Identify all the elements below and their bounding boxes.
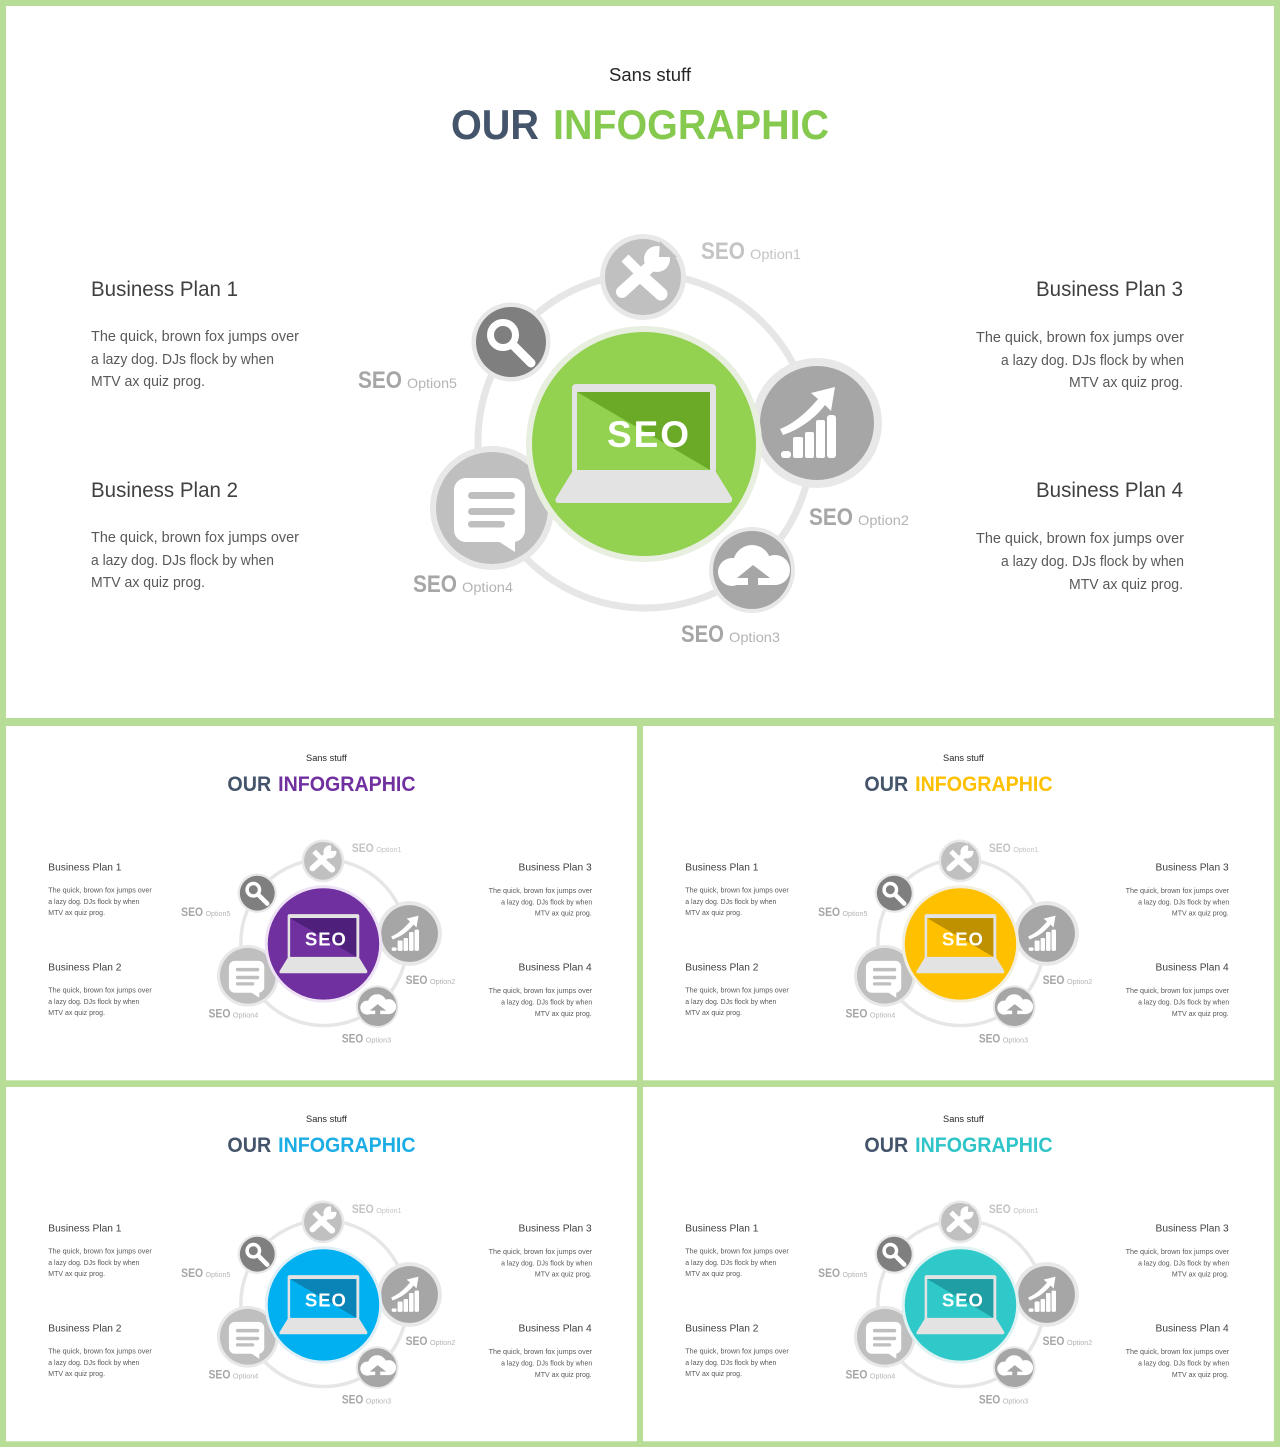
panel: yellow infographic [643, 726, 1274, 1080]
label: SEO Option5: SEO [818, 1266, 840, 1280]
icon: tools [302, 839, 344, 882]
text block: Business Plan 3: MTV ax quiz prog. [1069, 374, 1183, 391]
text block: Business Plan 4 [489, 962, 593, 1018]
central SEO laptop circle [265, 885, 382, 1003]
title: INFOGRAPHIC [553, 101, 829, 148]
label: SEO Option4 [413, 571, 513, 598]
label: SEO Option3: Option3 [1003, 1398, 1028, 1405]
text block: Business Plan 3: MTV ax quiz prog. [535, 909, 592, 918]
diagram ring [241, 859, 407, 1026]
text block: Business Plan 3: Business Plan 3 [1156, 862, 1229, 873]
central SEO laptop circle: SEO [305, 1289, 346, 1310]
label: SEO Option3: SEO [342, 1392, 363, 1406]
label: SEO Option4 [846, 1368, 895, 1382]
text block: Business Plan 1: a lazy dog. DJs flock by when [48, 1258, 139, 1267]
text block: Business Plan 2 [685, 1323, 789, 1378]
label: SEO Option2: Option2 [430, 1340, 455, 1347]
text block: Business Plan 1: Business Plan 1 [48, 862, 122, 873]
label: SEO Option4: SEO [209, 1368, 230, 1382]
label: SEO Option2 [406, 1334, 455, 1348]
label: SEO Option4 [209, 1368, 258, 1382]
text block: Business Plan 2 [91, 479, 299, 591]
text block: Business Plan 1: a lazy dog. DJs flock by when [48, 897, 139, 906]
text block: Business Plan 3 [489, 1223, 593, 1279]
text block: Business Plan 4: MTV ax quiz prog. [1172, 1370, 1229, 1379]
text block: Business Plan 4: MTV ax quiz prog. [535, 1370, 592, 1379]
label: SEO Option4: SEO [209, 1007, 230, 1021]
text block: Business Plan 2: Business Plan 2 [685, 962, 759, 973]
central SEO laptop circle [526, 326, 762, 562]
label: SEO Option5 [181, 1266, 231, 1280]
text block: Business Plan 1: The quick, brown fox jumps over [91, 328, 299, 345]
label: SEO Option2: Option2 [430, 979, 455, 986]
text block: Business Plan 3: a lazy dog. DJs flock by when [1001, 352, 1184, 369]
label: SEO Option5: Option5 [843, 1272, 868, 1279]
text block: Business Plan 1: The quick, brown fox jumps over [48, 886, 152, 895]
label: SEO Option3: SEO [342, 1031, 363, 1045]
text block: Business Plan 2: The quick, brown fox jumps over [685, 1347, 789, 1356]
text block: Business Plan 1: MTV ax quiz prog. [91, 373, 205, 390]
subtitle: Sans stuff [943, 1114, 984, 1124]
title: INFOGRAPHIC [278, 773, 416, 796]
text block: Business Plan 2 [48, 1323, 152, 1378]
text block: Business Plan 4 [489, 1323, 593, 1379]
panel: main green infographic [6, 6, 1274, 718]
text block: Business Plan 3: a lazy dog. DJs flock by when [501, 898, 592, 907]
label: SEO Option4: Option4 [233, 1013, 258, 1020]
central SEO laptop circle: SEO [942, 928, 983, 949]
label: SEO Option5 [818, 905, 868, 919]
diagram ring [878, 1220, 1044, 1387]
text block: Business Plan 1: Business Plan 1 [91, 278, 238, 301]
text block: Business Plan 3: MTV ax quiz prog. [535, 1270, 592, 1279]
icon: search [472, 302, 550, 382]
text block: Business Plan 3: The quick, brown fox jumps over [1126, 886, 1230, 895]
text block: Business Plan 3: The quick, brown fox jumps over [489, 886, 593, 895]
text block: Business Plan 4: Business Plan 4 [1156, 1323, 1229, 1334]
title: INFOGRAPHIC [915, 1134, 1053, 1157]
text block: Business Plan 1 [685, 862, 789, 917]
text block: Business Plan 4 [1126, 962, 1230, 1018]
icon: search [875, 1235, 914, 1274]
text block: Business Plan 2: Business Plan 2 [685, 1323, 759, 1334]
label: SEO Option3: SEO [681, 621, 724, 648]
text block: Business Plan 4: MTV ax quiz prog. [1172, 1009, 1229, 1018]
icon: tools [939, 839, 981, 882]
text block: Business Plan 1 [48, 862, 152, 917]
text block: Business Plan 4 [1126, 1323, 1230, 1379]
text block: Business Plan 2 [685, 962, 789, 1017]
central SEO laptop circle: SEO [942, 1289, 983, 1310]
text block: Business Plan 3: The quick, brown fox jumps over [1126, 1247, 1230, 1256]
text block: Business Plan 3: Business Plan 3 [1036, 278, 1183, 301]
text block: Business Plan 1: The quick, brown fox jumps over [685, 1247, 789, 1256]
text block: Business Plan 3 [976, 278, 1184, 391]
label: SEO Option1: SEO [352, 841, 374, 855]
icon: speech bubble [217, 1306, 279, 1368]
panel: purple infographic [6, 726, 637, 1080]
label: SEO Option1: Option1 [376, 847, 402, 854]
text block: Business Plan 3 [489, 862, 593, 918]
diagram ring [478, 274, 812, 608]
icon: tools [600, 234, 686, 320]
text block: Business Plan 2: Business Plan 2 [48, 962, 122, 973]
icon: growth chart [752, 358, 882, 488]
text block: Business Plan 1 [685, 1223, 789, 1278]
text block: Business Plan 3: MTV ax quiz prog. [1172, 909, 1229, 918]
text block: Business Plan 1: Business Plan 1 [685, 862, 759, 873]
label: SEO Option2: SEO [406, 973, 427, 987]
label: SEO Option1: SEO [352, 1202, 374, 1216]
label: SEO Option1 [352, 841, 402, 855]
text block: Business Plan 4: The quick, brown fox jumps over [489, 1347, 593, 1356]
label: SEO Option4: Option4 [233, 1374, 258, 1381]
label: SEO Option1: SEO [701, 238, 745, 265]
text block: Business Plan 1: a lazy dog. DJs flock by when [91, 351, 274, 368]
label: SEO Option4: Option4 [462, 579, 513, 595]
label: SEO Option5 [181, 905, 231, 919]
label: SEO Option1: Option1 [750, 246, 801, 262]
icon: speech bubble [854, 1306, 916, 1368]
label: SEO Option5: Option5 [206, 911, 231, 918]
label: SEO Option4: SEO [413, 571, 457, 598]
text block: Business Plan 1: a lazy dog. DJs flock by when [685, 1258, 776, 1267]
central SEO laptop circle: SEO [607, 414, 689, 455]
title: INFOGRAPHIC [278, 1134, 416, 1157]
text block: Business Plan 2: a lazy dog. DJs flock by when [48, 997, 139, 1006]
label: SEO Option1 [989, 841, 1039, 855]
title: OUR [451, 101, 539, 148]
label: SEO Option5: Option5 [407, 375, 457, 391]
label: SEO Option4: SEO [846, 1368, 867, 1382]
label: SEO Option3: SEO [979, 1392, 1000, 1406]
central SEO laptop circle: SEO [305, 928, 346, 949]
text block: Business Plan 4: The quick, brown fox jumps over [489, 986, 593, 995]
icon: search [238, 1235, 277, 1274]
label: SEO Option1: SEO [989, 1202, 1011, 1216]
diagram ring [241, 1220, 407, 1387]
text block: Business Plan 4: a lazy dog. DJs flock by when [1001, 553, 1184, 570]
label: SEO Option1 [701, 238, 801, 265]
text block: Business Plan 3: a lazy dog. DJs flock by when [1138, 898, 1229, 907]
title: INFOGRAPHIC [915, 773, 1053, 796]
text block: Business Plan 3: a lazy dog. DJs flock by when [501, 1259, 592, 1268]
label: SEO Option5: SEO [181, 905, 203, 919]
text block: Business Plan 2: MTV ax quiz prog. [685, 1008, 742, 1017]
label: SEO Option3: Option3 [729, 629, 780, 645]
text block: Business Plan 4: The quick, brown fox jumps over [976, 530, 1184, 547]
text block: Business Plan 2: MTV ax quiz prog. [91, 574, 205, 591]
subtitle: Sans stuff [306, 1114, 347, 1124]
label: SEO Option3 [979, 1392, 1028, 1406]
text block: Business Plan 1 [48, 1223, 152, 1278]
text block: Business Plan 1: MTV ax quiz prog. [685, 908, 742, 917]
central SEO laptop circle [902, 1246, 1019, 1364]
panel: blue infographic [6, 1087, 637, 1441]
text block: Business Plan 1: MTV ax quiz prog. [685, 1269, 742, 1278]
text block: Business Plan 4 [976, 479, 1184, 593]
label: SEO Option3: Option3 [1003, 1037, 1028, 1044]
text block: Business Plan 2: MTV ax quiz prog. [48, 1369, 105, 1378]
text block: Business Plan 3: The quick, brown fox jumps over [976, 329, 1184, 346]
title: OUR [227, 1134, 271, 1157]
text block: Business Plan 4: The quick, brown fox jumps over [1126, 986, 1230, 995]
label: SEO Option1: Option1 [376, 1208, 402, 1215]
text block: Business Plan 3: MTV ax quiz prog. [1172, 1270, 1229, 1279]
text block: Business Plan 2: a lazy dog. DJs flock by when [48, 1358, 139, 1367]
icon: speech bubble [854, 945, 916, 1007]
label: SEO Option1 [989, 1202, 1039, 1216]
label: SEO Option4: Option4 [870, 1374, 895, 1381]
label: SEO Option2: Option2 [1067, 1340, 1092, 1347]
text block: Business Plan 3: Business Plan 3 [519, 1223, 592, 1234]
text block: Business Plan 2: Business Plan 2 [91, 479, 238, 502]
central SEO laptop circle [902, 885, 1019, 1003]
text block: Business Plan 2: The quick, brown fox jumps over [48, 1347, 152, 1356]
text block: Business Plan 1: Business Plan 1 [48, 1223, 122, 1234]
label: SEO Option1: SEO [989, 841, 1011, 855]
icon: search [238, 874, 277, 913]
label: SEO Option2 [809, 504, 909, 531]
text block: Business Plan 4: Business Plan 4 [1156, 962, 1229, 973]
label: SEO Option2: Option2 [858, 512, 909, 528]
text block: Business Plan 2: The quick, brown fox jumps over [91, 529, 299, 546]
label: SEO Option1: Option1 [1013, 847, 1039, 854]
text block: Business Plan 2: MTV ax quiz prog. [48, 1008, 105, 1017]
label: SEO Option3 [342, 1031, 391, 1045]
text block: Business Plan 1: The quick, brown fox jumps over [685, 886, 789, 895]
icon: cloud upload [993, 1346, 1036, 1389]
text block: Business Plan 1: MTV ax quiz prog. [48, 1269, 105, 1278]
label: SEO Option2 [1043, 1334, 1092, 1348]
text block: Business Plan 3: Business Plan 3 [519, 862, 592, 873]
icon: cloud upload [356, 985, 399, 1028]
label: SEO Option4: Option4 [870, 1013, 895, 1020]
text block: Business Plan 4: MTV ax quiz prog. [1069, 576, 1183, 593]
text block: Business Plan 4: Business Plan 4 [1036, 479, 1183, 502]
label: SEO Option5: Option5 [843, 911, 868, 918]
text block: Business Plan 4: a lazy dog. DJs flock by when [501, 1359, 592, 1368]
text block: Business Plan 1 [91, 278, 299, 390]
central SEO laptop circle [265, 1246, 382, 1364]
label: SEO Option3 [979, 1031, 1028, 1045]
label: SEO Option1 [352, 1202, 402, 1216]
text block: Business Plan 3 [1126, 862, 1230, 918]
icon: growth chart [1014, 1262, 1079, 1327]
label: SEO Option5: SEO [358, 367, 402, 394]
text block: Business Plan 3 [1126, 1223, 1230, 1279]
icon: speech bubble [430, 446, 554, 570]
icon: cloud upload [356, 1346, 399, 1389]
text block: Business Plan 4: Business Plan 4 [519, 1323, 592, 1334]
text block: Business Plan 4: MTV ax quiz prog. [535, 1009, 592, 1018]
text block: Business Plan 4: a lazy dog. DJs flock by when [1138, 998, 1229, 1007]
text block: Business Plan 1: The quick, brown fox jumps over [48, 1247, 152, 1256]
label: SEO Option2: Option2 [1067, 979, 1092, 986]
label: SEO Option5 [818, 1266, 868, 1280]
subtitle: Sans stuff [609, 65, 692, 85]
label: SEO Option3: Option3 [366, 1037, 391, 1044]
subtitle: Sans stuff [943, 753, 984, 763]
icon: tools [302, 1200, 344, 1243]
icon: growth chart [377, 1262, 442, 1327]
label: SEO Option5: SEO [818, 905, 840, 919]
label: SEO Option2: SEO [1043, 1334, 1064, 1348]
title: OUR [864, 773, 908, 796]
icon: cloud upload [993, 985, 1036, 1028]
label: SEO Option3 [681, 621, 780, 648]
label: SEO Option4: SEO [846, 1007, 867, 1021]
text block: Business Plan 4: The quick, brown fox jumps over [1126, 1347, 1230, 1356]
label: SEO Option4 [846, 1007, 895, 1021]
text block: Business Plan 3: Business Plan 3 [1156, 1223, 1229, 1234]
text block: Business Plan 2: Business Plan 2 [48, 1323, 122, 1334]
icon: growth chart [377, 901, 442, 966]
text block: Business Plan 1: MTV ax quiz prog. [48, 908, 105, 917]
text block: Business Plan 2: The quick, brown fox jumps over [685, 986, 789, 995]
label: SEO Option2: SEO [406, 1334, 427, 1348]
icon: tools [939, 1200, 981, 1243]
label: SEO Option5 [358, 367, 457, 394]
text block: Business Plan 2: a lazy dog. DJs flock by when [91, 552, 274, 569]
text block: Business Plan 2: a lazy dog. DJs flock by when [685, 1358, 776, 1367]
label: SEO Option2 [406, 973, 455, 987]
icon: growth chart [1014, 901, 1079, 966]
text block: Business Plan 2: MTV ax quiz prog. [685, 1369, 742, 1378]
label: SEO Option3 [342, 1392, 391, 1406]
icon: cloud upload [709, 527, 795, 613]
text block: Business Plan 2: a lazy dog. DJs flock by when [685, 997, 776, 1006]
label: SEO Option1: Option1 [1013, 1208, 1039, 1215]
panel: teal infographic [643, 1087, 1274, 1441]
text block: Business Plan 1: a lazy dog. DJs flock by when [685, 897, 776, 906]
icon: speech bubble [217, 945, 279, 1007]
label: SEO Option3: SEO [979, 1031, 1000, 1045]
icon: search [875, 874, 914, 913]
label: SEO Option2: SEO [1043, 973, 1064, 987]
text block: Business Plan 2 [48, 962, 152, 1017]
label: SEO Option5: Option5 [206, 1272, 231, 1279]
title: OUR [864, 1134, 908, 1157]
title: OUR [227, 773, 271, 796]
text block: Business Plan 4: Business Plan 4 [519, 962, 592, 973]
diagram ring [878, 859, 1044, 1026]
label: SEO Option2 [1043, 973, 1092, 987]
text block: Business Plan 3: a lazy dog. DJs flock by when [1138, 1259, 1229, 1268]
label: SEO Option5: SEO [181, 1266, 203, 1280]
text block: Business Plan 4: a lazy dog. DJs flock by when [1138, 1359, 1229, 1368]
label: SEO Option3: Option3 [366, 1398, 391, 1405]
text block: Business Plan 1: Business Plan 1 [685, 1223, 759, 1234]
subtitle: Sans stuff [306, 753, 347, 763]
text block: Business Plan 3: The quick, brown fox jumps over [489, 1247, 593, 1256]
label: SEO Option2: SEO [809, 504, 853, 531]
label: SEO Option4 [209, 1007, 258, 1021]
text block: Business Plan 4: a lazy dog. DJs flock by when [501, 998, 592, 1007]
text block: Business Plan 2: The quick, brown fox jumps over [48, 986, 152, 995]
